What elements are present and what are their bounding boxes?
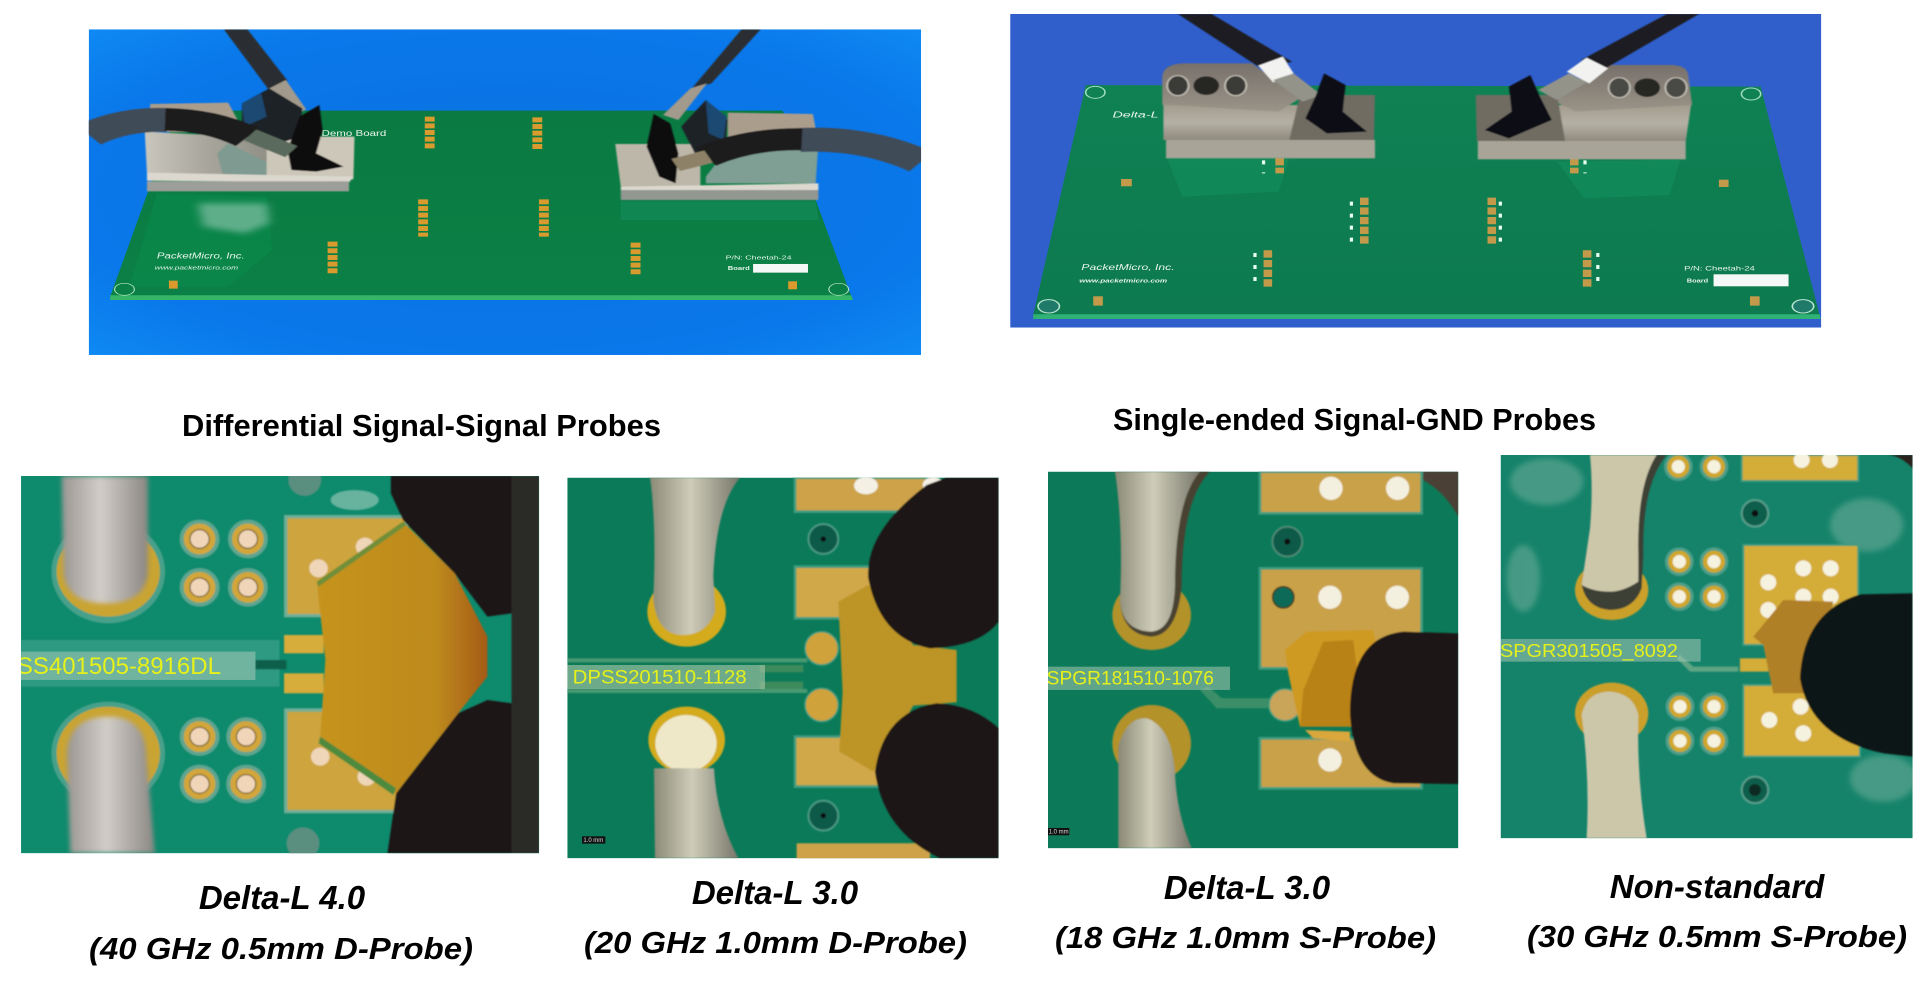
caption: Delta-L 4.0 [89, 879, 473, 966]
caption: Non-standard [1527, 868, 1907, 954]
cables [62, 476, 155, 853]
caption: Delta-L 3.0 D-Probe: Delta-L 3.0 [692, 874, 859, 911]
photo: Delta-L 4.0 microscope view [17, 464, 539, 859]
photo: single-ended probes on demo board [1010, 14, 1821, 328]
caption: Non-standard: (30 GHz 0.5mm S-Probe) [1527, 919, 1907, 954]
board silkscreen text: www.packetmicro.com [1079, 277, 1167, 284]
right fixture and probe [615, 29, 921, 200]
right fixture and probe [1476, 14, 1699, 159]
part number label: SPGR301505_8092 [1500, 640, 1678, 662]
part number label: SPGR181510-1076 [1047, 669, 1214, 690]
caption: Delta-L 3.0 D-Probe: (20 GHz 1.0mm D-Probe) [584, 925, 967, 960]
scale bar [582, 836, 605, 844]
scale bar: 1.0 mm [1049, 830, 1069, 836]
part number label: DPSS201510-1128 [573, 668, 747, 689]
left fixture and probe [89, 29, 354, 191]
board silkscreen text: Demo Board [322, 129, 386, 138]
circuit board [110, 111, 853, 300]
caption: Delta-L 3.0 D-Probe [584, 874, 967, 960]
heading: single-ended probes: Single-ended Signal-GND Probes [1113, 402, 1596, 437]
caption: Non-standard: Non-standard [1610, 868, 1825, 905]
board silkscreen text: PacketMicro, Inc. [157, 252, 245, 261]
board silkscreen text: Delta-L [1112, 111, 1159, 120]
board silkscreen text [1079, 111, 1755, 284]
photo: Delta-L 3.0 single-ended microscope view [1047, 472, 1458, 848]
caption: Delta-L 4.0: (40 GHz 0.5mm D-Probe) [89, 931, 473, 966]
board silkscreen text: Board [1687, 278, 1708, 284]
caption: Delta-L 3.0 S-Probe: Delta-L 3.0 [1164, 869, 1331, 906]
photo: differential probes on demo board [89, 29, 921, 355]
photo: non-standard microscope view [1500, 452, 1917, 838]
board silkscreen text [155, 129, 792, 271]
photo: Delta-L 3.0 differential microscope view [567, 477, 999, 860]
caption: Delta-L 4.0: Delta-L 4.0 [199, 879, 366, 916]
board silkscreen text: P/N: Cheetah-24 [1684, 264, 1755, 272]
board silkscreen text: Board [728, 266, 750, 271]
board silkscreen text: www.packetmicro.com [155, 264, 238, 271]
scale bar: 1.0 mm [583, 838, 603, 844]
caption: Delta-L 3.0 S-Probe [1055, 869, 1436, 955]
caption: Delta-L 3.0 S-Probe: (18 GHz 1.0mm S-Probe) [1055, 920, 1436, 955]
heading: differential probes: Differential Signal-Signal Probes [182, 408, 661, 443]
part number label: SS401505-8916DL [17, 653, 221, 680]
board silkscreen text: PacketMicro, Inc. [1081, 263, 1175, 272]
circuit board [1033, 85, 1821, 319]
left fixture and probe [1162, 14, 1375, 158]
board silkscreen text: P/N: Cheetah-24 [726, 254, 792, 261]
